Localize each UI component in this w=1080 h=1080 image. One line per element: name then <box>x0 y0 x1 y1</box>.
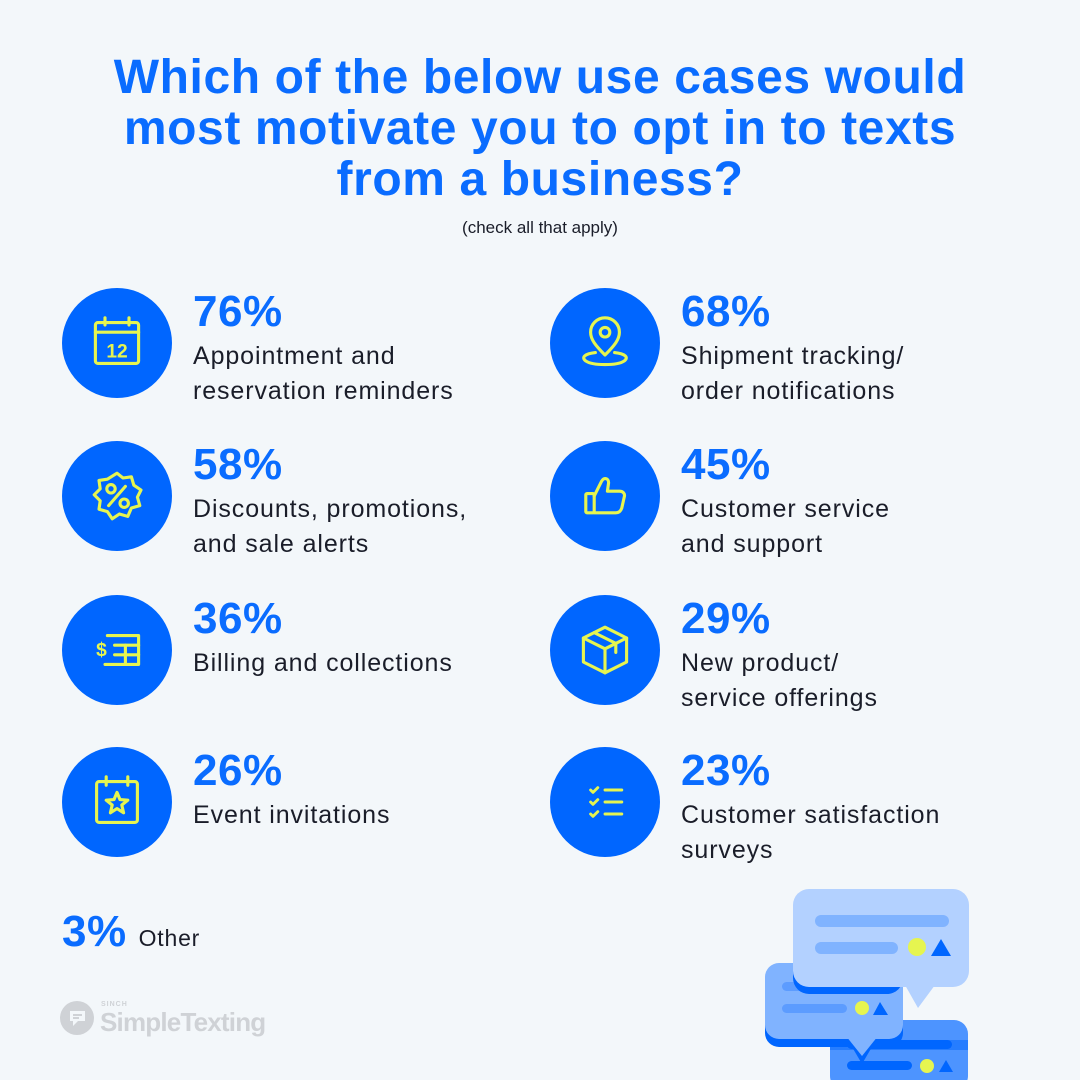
icon: billing: $ <box>96 640 107 661</box>
text: reservation reminders <box>193 377 454 405</box>
subtitle: (check all that apply) <box>462 218 618 237</box>
illustration: chat bubbles <box>765 889 969 1080</box>
text: order notifications <box>681 377 895 405</box>
text <box>681 440 890 558</box>
text: Shipment tracking/ <box>681 342 904 370</box>
icon: box <box>550 595 660 705</box>
text: Appointment and <box>193 342 396 370</box>
text <box>193 440 467 558</box>
icon: thumbs up <box>550 441 660 551</box>
text <box>681 287 904 405</box>
text: Billing and collections <box>193 649 453 677</box>
text: 26% <box>193 746 283 795</box>
text: 45% <box>681 440 771 489</box>
title <box>114 51 966 206</box>
item: 45% customer service <box>550 440 890 558</box>
text: Customer service <box>681 495 890 523</box>
text: service offerings <box>681 684 878 712</box>
text: Event invitations <box>193 801 390 829</box>
item: 76% appointment <box>62 287 454 405</box>
text: and support <box>681 530 823 558</box>
text <box>193 594 453 677</box>
icon: billing <box>62 595 172 705</box>
text: 29% <box>681 594 771 643</box>
logo: SimpleTexting <box>100 1007 265 1037</box>
text: 36% <box>193 594 283 643</box>
item: 23% surveys <box>550 746 940 864</box>
text: New product/ <box>681 649 839 677</box>
logo: SINCH <box>101 1001 128 1008</box>
text: 23% <box>681 746 771 795</box>
icon: location pin <box>550 288 660 398</box>
title: Which of the below use cases would <box>114 51 966 104</box>
text <box>681 746 940 864</box>
title: most motivate you to opt in to texts <box>124 102 956 155</box>
icon: discount badge <box>62 441 172 551</box>
text: and sale alerts <box>193 530 369 558</box>
icon: calendar star <box>62 747 172 857</box>
icon: calendar <box>62 288 172 398</box>
text: 68% <box>681 287 771 336</box>
text: Customer satisfaction <box>681 801 940 829</box>
text <box>193 746 390 829</box>
item: 58% discounts <box>62 440 467 558</box>
item: 68% shipment <box>550 287 904 405</box>
other: 3% Other <box>62 907 200 956</box>
logo <box>60 1001 265 1037</box>
icon: calendar: 12 <box>106 341 128 362</box>
text: 58% <box>193 440 283 489</box>
text: surveys <box>681 836 773 864</box>
item: 36% billing <box>62 594 453 705</box>
text <box>193 287 454 405</box>
item: 26% events <box>62 746 390 857</box>
item: 29% new product <box>550 594 878 712</box>
text: Discounts, promotions, <box>193 495 467 523</box>
text <box>681 594 878 712</box>
icon: checklist <box>550 747 660 857</box>
title: from a business? <box>336 153 744 206</box>
text: 76% <box>193 287 283 336</box>
